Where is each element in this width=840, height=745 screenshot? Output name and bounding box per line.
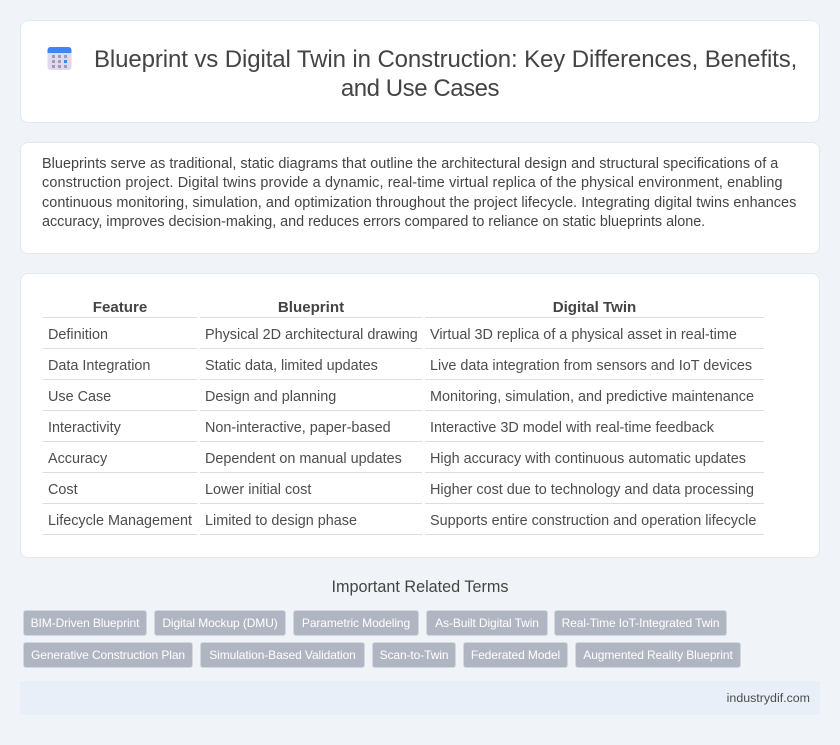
tag: Parametric Modeling	[302, 616, 410, 630]
tag: Scan-to-Twin	[380, 648, 448, 662]
row: Data Integration: Static data, limited updates	[205, 358, 378, 374]
row: Interactivity: Interactivity	[48, 420, 121, 436]
row: Cost: Higher cost due to technology and data processing	[430, 482, 754, 498]
row: Definition	[48, 327, 737, 343]
row: Cost: Lower initial cost	[205, 482, 311, 498]
intro text: accuracy, improves decision-making, and reduces errors compared to reliance on static blueprints alone.	[42, 214, 705, 230]
tag	[23, 642, 193, 668]
footer source: industrydif.com	[727, 691, 810, 705]
tag: Digital Mockup (DMU)	[162, 616, 278, 630]
row: Accuracy: Dependent on manual updates	[205, 451, 402, 467]
row: Data Integration: Data Integration	[48, 358, 150, 374]
tag	[200, 642, 365, 668]
tag	[554, 610, 727, 636]
row: Use Case: Design and planning	[205, 389, 336, 405]
title	[94, 46, 797, 102]
title: and Use Cases	[341, 75, 499, 102]
row: Use Case: Monitoring, simulation, and predictive maintenance	[430, 389, 754, 405]
title: Blueprint vs Digital Twin in Construction: Key Differences, Benefits,	[94, 46, 797, 73]
row: Interactivity	[48, 420, 714, 436]
panel: title card	[20, 20, 820, 123]
comparison table	[43, 299, 764, 535]
row: Interactivity: Interactive 3D model with real-time feedback	[430, 420, 714, 436]
tag: As-Built Digital Twin	[435, 616, 539, 630]
table header: Feature: Feature	[93, 299, 147, 316]
tag	[154, 610, 286, 636]
tag	[372, 642, 456, 668]
row: Lifecycle Management: Supports entire construction and operation lifecycle	[430, 513, 756, 529]
table header: Digital Twin: Digital Twin	[553, 299, 636, 316]
heading: Important Related Terms: Important Related Terms	[332, 578, 508, 596]
tag	[293, 610, 419, 636]
row: Data Integration	[48, 358, 752, 374]
row: Accuracy: High accuracy with continuous automatic updates	[430, 451, 746, 467]
row: Accuracy: Accuracy	[48, 451, 107, 467]
row: Lifecycle Management: Lifecycle Management	[48, 513, 192, 529]
tag	[23, 610, 147, 636]
row: Data Integration: Live data integration from sensors and IoT devices	[430, 358, 752, 374]
panel: intro paragraph	[20, 142, 820, 254]
row: Definition: Virtual 3D replica of a physical asset in real-time	[430, 327, 737, 343]
row: Definition: Physical 2D architectural drawing	[205, 327, 418, 343]
row: Definition: Definition	[48, 327, 108, 343]
tag	[575, 642, 741, 668]
tag: Real-Time IoT-Integrated Twin	[562, 616, 719, 630]
intro text: Blueprints serve as traditional, static diagrams that outline the architectural design and structural specifications of a	[42, 156, 778, 172]
related terms tags	[23, 610, 741, 668]
tag: Simulation-Based Validation	[209, 648, 356, 662]
tag: Generative Construction Plan	[31, 648, 185, 662]
row: Cost: Cost	[48, 482, 78, 498]
tag: BIM-Driven Blueprint	[31, 616, 139, 630]
row: Use Case	[48, 389, 754, 405]
intro text: continuous monitoring, simulation, and optimization throughout the project lifecycle. Integrating digital twins enhances	[42, 195, 796, 211]
intro text	[42, 156, 796, 230]
panel: comparison table card	[20, 273, 820, 558]
row: Accuracy	[48, 451, 746, 467]
intro text: construction project. Digital twins provide a dynamic, real-time virtual replica of the physical environment, enabling	[42, 175, 783, 191]
row: Interactivity: Non-interactive, paper-based	[205, 420, 391, 436]
row: Use Case: Use Case	[48, 389, 111, 405]
icon: blueprint grid	[48, 47, 72, 70]
row: Lifecycle Management: Limited to design phase	[205, 513, 357, 529]
table header: Blueprint: Blueprint	[278, 299, 344, 316]
tag	[426, 610, 548, 636]
footer bar	[20, 681, 820, 715]
row: Cost	[48, 482, 754, 498]
tag: Augmented Reality Blueprint	[583, 648, 733, 662]
tag: Federated Model	[471, 648, 560, 662]
row: Lifecycle Management	[48, 513, 756, 529]
tag	[463, 642, 568, 668]
